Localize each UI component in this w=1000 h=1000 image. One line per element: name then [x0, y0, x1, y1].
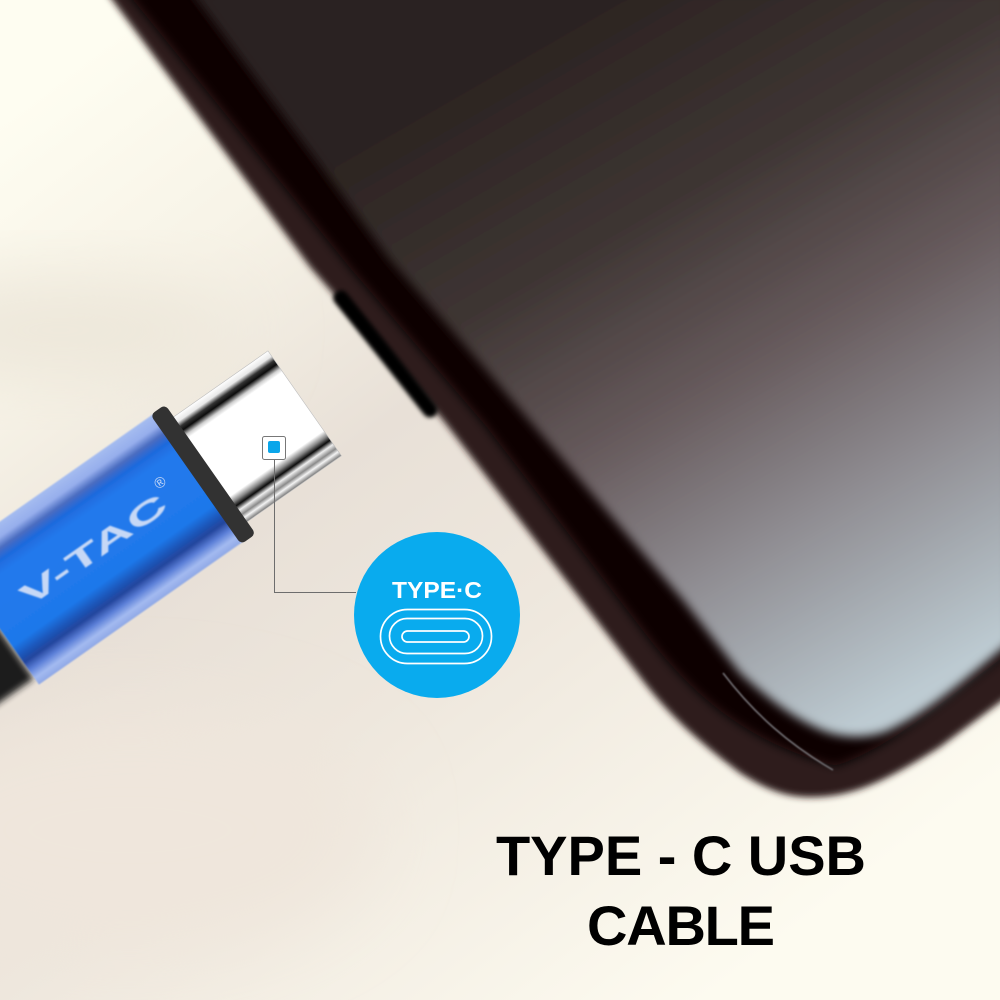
callout leader line [274, 460, 356, 592]
phone edge highlight [723, 673, 833, 770]
title [496, 824, 866, 957]
title: CABLE [587, 894, 775, 957]
USB-C port icon [380, 610, 492, 664]
V-TAC logo: V-TAC [14, 487, 174, 613]
badge label: TYPE·C [392, 577, 482, 603]
phone [105, 0, 1000, 797]
title: TYPE - C USB [496, 824, 866, 887]
phone dark edge band [125, 0, 1000, 766]
phone screen [190, 0, 1000, 737]
dark collar ring [150, 405, 256, 544]
callout marker [262, 436, 286, 460]
black boot [0, 570, 34, 769]
charging port slot [341, 298, 430, 410]
connector plug [170, 351, 341, 525]
blue aluminium housing [0, 413, 244, 685]
phone body bezel [105, 0, 1000, 797]
callout badge [354, 532, 520, 698]
cable [0, 339, 350, 777]
registered mark: ® [151, 473, 170, 493]
